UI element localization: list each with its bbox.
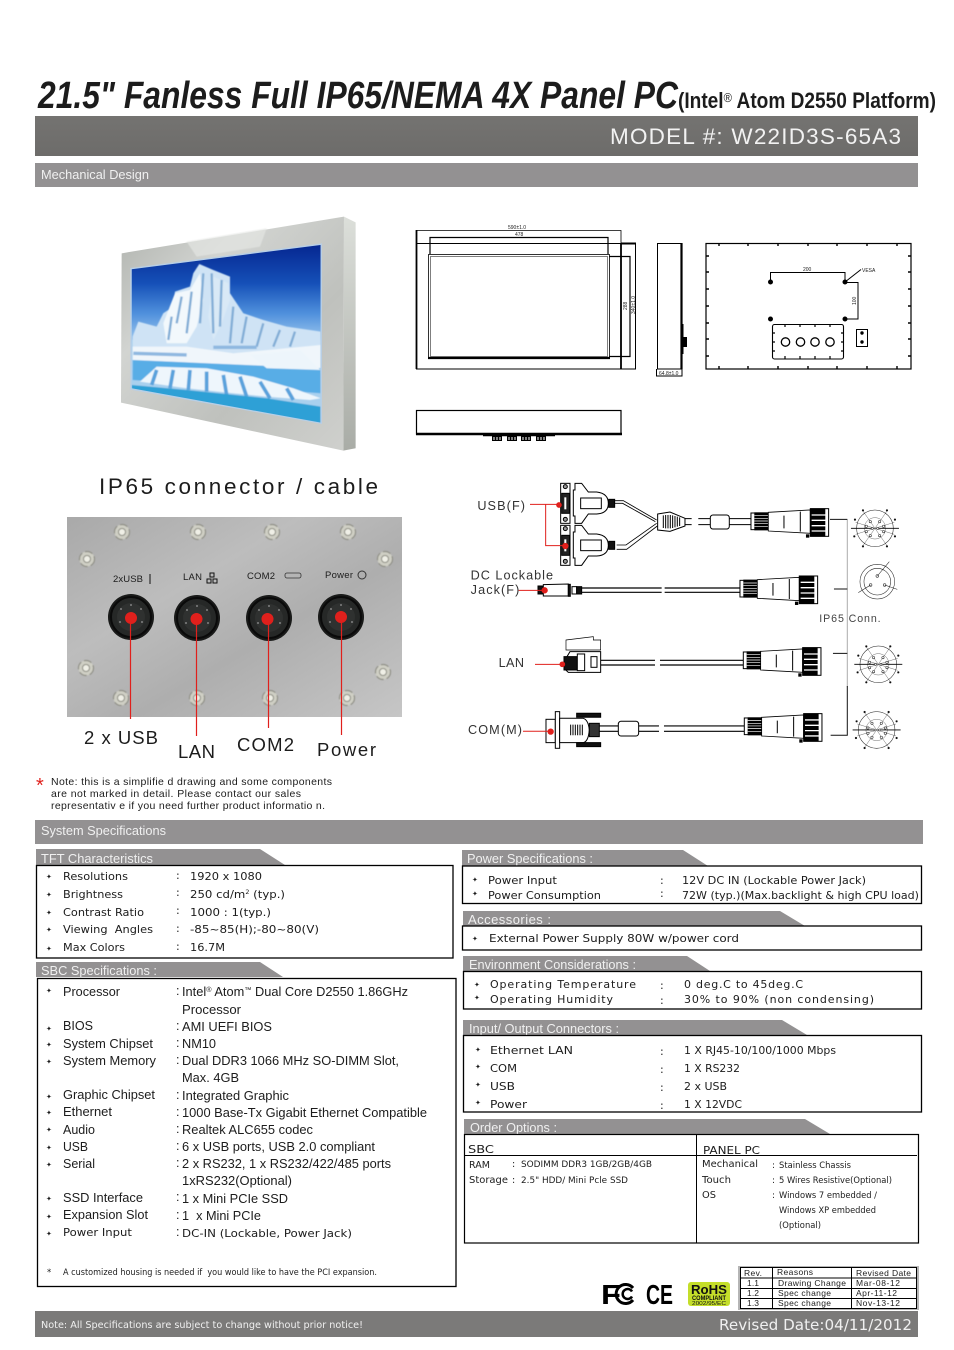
port captions: 2xUSB [113,574,143,585]
drawing: front view: 478 [515,232,524,238]
panel: input/output connectors: : [660,1099,664,1112]
panel: environment considerations: ✦ [474,994,480,1002]
cable labels: DC Lockable [471,568,553,582]
order options: panel PC: OS [702,1190,716,1201]
TFT rows: ✦ [46,873,52,881]
panel: input/output connectors [463,1020,922,1112]
footnote: * [47,1268,51,1278]
panel: power specifications: ✦ [472,876,478,884]
panel: power specifications: Power Input [488,874,558,887]
cable: COM [546,712,822,748]
SBC rows: Processor [182,1003,241,1017]
revision table [738,1266,919,1310]
TFT rows: Viewing Angles [63,923,153,936]
order options: SBC: SODIMM DDR3 1GB/2GB/4GB [521,1160,652,1170]
order options: panel PC: Stainless Chassis [779,1161,851,1171]
panel: TFT characteristics [36,849,453,958]
SBC rows: : [176,1019,179,1033]
SBC rows: NM10 [182,1037,216,1051]
port labels: COM2 [237,734,294,755]
panel: power specifications: Power Specifications : [467,851,593,866]
cable labels: IP65 Conn. [819,613,881,625]
panel: input/output connectors: : [660,1063,664,1076]
SBC rows: Expansion Slot [63,1208,149,1222]
panel: power specifications: Power Consumption [488,889,601,902]
drawing: rear view with VESA holes [706,243,911,369]
panel: input/output connectors: : [660,1045,664,1058]
revision table: Nov-13-12 [856,1298,900,1308]
panel: power specifications [462,850,922,904]
TFT rows: : [176,886,180,899]
SBC rows: System Chipset [63,1037,154,1051]
red leader lines [519,503,568,734]
order options: panel PC: (Optional) [779,1221,821,1231]
SBC rows: DC-IN (Lockable, Power Jack) [182,1227,352,1240]
panel: environment considerations: Operating Temperature [490,978,636,991]
SBC rows: System Memory [63,1054,157,1068]
SBC rows: ✦ [46,987,52,995]
section bar: system specifications [35,820,923,844]
order options: panel PC: Touch [701,1175,731,1186]
SBC rows: ✦ [46,1109,52,1117]
TFT rows: 16.7M [190,941,225,954]
pinouts [851,509,902,749]
order options: SBC: 2.5" HDD/ Mini Pcle SSD [521,1176,628,1186]
SBC rows [46,984,427,1240]
panel: input/output connectors: ✦ [475,1099,481,1107]
cable labels: Jack(F) [471,583,519,597]
SBC rows: : [176,1225,179,1239]
title: 21.5" Fanless Full IP65/NEMA 4X Panel PC [37,75,678,117]
panel: environment considerations [463,956,922,1009]
order options: SBC: RAM [469,1160,490,1171]
panel: environment considerations: ✦ [474,981,480,989]
cable: USB [561,483,829,565]
order options: SBC: : [512,1159,515,1170]
SBC rows: USB [63,1140,88,1154]
cable labels: USB(F) [477,499,525,513]
TFT rows: 1000 : 1(typ.) [190,906,271,919]
order options: panel PC: Windows 7 embedded / [779,1191,878,1201]
red markers [126,612,346,736]
revision table: Mar-08-12 [856,1278,900,1288]
panel: input/output connectors: 1 X RS232 [684,1062,740,1075]
SBC rows: : [176,1208,179,1222]
TFT rows: -85~85(H);-80~80(V) [190,923,319,936]
port labels: 2 x USB [84,727,158,748]
order options: SBC: Storage [469,1175,508,1186]
panel: power specifications: 12V DC IN (Lockable Power Jack) [682,874,866,887]
drawing: side view [656,243,687,377]
drawing: rear view with VESA holes: 200 [803,267,812,273]
SBC rows: 1 x Mini PCIe [182,1209,261,1223]
drawing: side view: 64.8±1.0 [659,371,679,377]
SBC rows: : [176,1088,179,1102]
SBC rows: Max. 4GB [182,1071,239,1085]
SBC rows: ✦ [46,1058,52,1066]
footnote: A customized housing is needed if you would like to have the PCI expansion. [63,1268,377,1278]
panel: environment considerations: 30% to 90% (non condensing) [684,993,874,1006]
model banner [35,116,918,156]
drawing: rear view with VESA holes: 100 [852,296,858,305]
panel: input/output connectors: 1 X RJ45-10/100/1000 Mbps [684,1044,836,1057]
panel: input/output connectors: Power [490,1098,528,1111]
panel: input/output connectors: ✦ [475,1063,481,1071]
TFT rows [46,869,319,954]
TFT rows: : [176,904,180,917]
panel: power specifications: : [660,887,664,900]
panel: accessories: ✦ [472,935,478,943]
footer bar: Revised Date:04/11/2012 [719,1316,912,1334]
SBC rows: Ethernet [63,1105,113,1119]
SBC rows: : [176,1139,179,1153]
SBC rows: : [176,1190,179,1204]
order options: panel PC: : [772,1176,775,1186]
TFT rows: Contrast Ratio [63,906,144,919]
logo: RoHS: 2002/95/EC [692,1301,726,1307]
order options: SBC: SBC [468,1143,494,1156]
IP65 connector bracket [830,519,847,735]
SBC rows: ✦ [46,1144,52,1152]
logo: FCC [601,1279,633,1310]
panel: power specifications: : [660,874,664,887]
SBC rows: Realtek ALC655 codec [182,1123,313,1137]
SBC rows: ® [206,986,212,994]
revision table: Reasons [777,1267,813,1277]
panel: order options [464,1119,918,1243]
SBC rows: ✦ [46,1195,52,1203]
SBC rows: Integrated Graphic [182,1089,289,1103]
panel: accessories [462,911,922,950]
cable: DC jack [538,576,818,605]
drawing: rear view with VESA holes: VESA [862,268,876,274]
TFT rows: 250 cd/m [190,888,242,901]
panel: input/output connectors: COM [490,1062,517,1075]
TFT rows: : [176,922,180,935]
order options: SBC: : [512,1175,515,1186]
revision table: Spec change [778,1288,831,1298]
footer bar [35,1311,918,1337]
panel: input/output connectors: Ethernet LAN [490,1044,573,1057]
panel: input/output connectors: 1 X 12VDC [684,1098,742,1111]
SBC rows: Graphic Chipset [63,1088,156,1102]
cable diagram [468,483,902,749]
revision table: Rev. [744,1268,762,1278]
footer bar: Note: All Specifications are subject to change without prior notice! [41,1320,363,1331]
SBC rows: Power Input [63,1226,133,1239]
panel: accessories: External Power Supply 80W w/power cord [489,932,739,945]
cable labels: COM(M) [468,723,522,737]
note: representativ e if you need further product informatio n. [51,800,325,812]
revision table: Revised Date [856,1268,911,1278]
panel: input/output connectors: ✦ [475,1046,481,1054]
order options: panel PC: : [772,1191,775,1201]
logo: CE: CE [646,1279,673,1310]
round connectors [108,594,364,641]
SBC rows: BIOS [63,1019,93,1033]
order options: panel PC: 5 Wires Resistive(Optional) [779,1176,892,1186]
SBC rows: 2 x RS232, 1 x RS232/422/485 ports [182,1157,391,1171]
SBC rows: Audio [63,1123,95,1137]
section bar: mechanical design: Mechanical Design [41,167,149,182]
panel: input/output connectors: ✦ [475,1081,481,1089]
TFT rows: ✦ [46,945,52,953]
SBC rows: : [176,1053,179,1067]
SBC rows: ✦ [46,1230,52,1238]
port captions: COM2 [247,571,275,582]
drawing: front view: 340±1.0 [631,296,637,314]
panel: input/output connectors: : [660,1081,664,1094]
order options: panel PC: Mechanical [702,1159,758,1170]
cable: LAN [564,637,821,677]
TFT rows: Brightness [63,888,123,901]
SBC rows: ™ [244,987,251,994]
photo: connector panel [67,517,402,736]
cable labels: LAN [499,656,524,670]
SBC rows: : [176,1122,179,1136]
port captions [113,570,366,585]
port captions: Power [325,570,353,581]
panel: accessories: Accessories : [468,912,551,927]
port captions: LAN [183,572,202,583]
TFT rows: 2 [245,889,250,896]
port labels: LAN [178,741,215,762]
logo: RoHS: COMPLIANT [692,1296,726,1302]
order options: SBC [468,1143,652,1186]
note: Note: this is a simplifie d drawing and some components [51,776,332,788]
SBC rows: ✦ [46,1041,52,1049]
panel: SBC specifications [36,962,456,1286]
SBC rows: Dual DDR3 1066 MHz SO-DIMM Slot, [182,1054,399,1068]
logo: RoHS [688,1282,730,1307]
SBC rows: 1000 Base-Tx Gigabit Ethernet Compatible [182,1106,427,1120]
port labels: Power [317,739,376,760]
panel: environment considerations: : [660,994,664,1007]
SBC rows: : [176,1036,179,1050]
panel: SBC specifications: SBC Specifications : [41,963,157,978]
SBC rows: AMI UEFI BIOS [182,1020,272,1034]
SBC rows: : [176,1156,179,1170]
panel: input/output connectors: 2 x USB [684,1080,727,1093]
panel: power specifications: ✦ [472,890,478,898]
SBC rows: : [176,1105,179,1119]
revision table: Drawing Change [778,1278,846,1288]
product photo: panel PC [121,217,356,451]
TFT rows: Max Colors [63,941,125,954]
drawing: bottom view [416,410,622,441]
note [36,775,332,812]
model banner: MODEL #: W22ID3S-65A3 [610,124,901,149]
revision table: 1.3 [747,1298,759,1308]
panel: input/output connectors: USB [490,1080,515,1093]
SBC rows: SSD Interface [63,1191,143,1205]
panel: order options: Order Options : [470,1120,557,1135]
SBC rows: 1xRS232(Optional) [182,1174,292,1188]
panel: input/output connectors: Input/ Output Connectors : [469,1021,619,1036]
SBC rows: Atom [212,985,244,999]
subtitle: (Intel [678,88,731,113]
cable labels [468,499,881,737]
TFT rows: 1920 x 1080 [190,870,262,883]
section bar: mechanical design [35,163,918,187]
panel: environment considerations: Environment Considerations : [469,957,636,972]
note: are not marked in detail. Please contact our sales [51,788,301,800]
SBC rows: ✦ [46,1093,52,1101]
SBC rows: Serial [63,1157,95,1171]
SBC rows: ✦ [46,1161,52,1169]
drawing: front view [416,225,637,369]
SBC rows: Processor [63,985,120,999]
revision table: Spec change [778,1298,831,1308]
TFT rows: ✦ [46,926,52,934]
logo: RoHS: RoHS [691,1282,727,1297]
TFT rows: (typ.) [249,888,285,901]
drawing: front view: 288 [623,301,629,310]
order options: panel PC: PANEL PC [703,1144,760,1157]
SBC rows: ✦ [46,1213,52,1221]
revision table: Apr-11-12 [856,1288,897,1298]
TFT rows: : [176,869,180,882]
note: * [36,775,44,797]
section bar: system specifications: System Specifications [41,823,166,838]
TFT rows: Resolutions [63,870,128,883]
revision table: 1.2 [747,1288,759,1298]
SBC rows: 1 x Mini PCIe SSD [182,1192,288,1206]
drawing: front view: 590±1.0 [508,225,526,231]
panel: environment considerations: Operating Humidity [490,993,613,1006]
logo: FCC: F [601,1279,621,1310]
panel: environment considerations: : [660,979,664,992]
port labels [84,727,376,762]
revision table: 1.1 [747,1278,759,1288]
TFT rows: ✦ [46,891,52,899]
SBC rows: 6 x USB ports, USB 2.0 compliant [182,1140,376,1154]
SBC rows: Dual Core D2550 1.86GHz [251,985,408,999]
panel: power specifications: 72W (typ.)(Max.backlight & high CPU load) [682,889,919,902]
subtitle: ® [724,90,732,105]
SBC rows: ✦ [46,1025,52,1033]
SBC rows: Intel [182,985,206,999]
panel: TFT characteristics: TFT Characteristics [41,851,153,866]
heading: IP65 connector / cable: IP65 connector / cable [99,474,378,499]
SBC rows: ✦ [46,1126,52,1134]
TFT rows: : [176,940,180,953]
TFT rows: ✦ [46,909,52,917]
panel: environment considerations: 0 deg.C to 45deg.C [684,978,803,991]
order options: panel PC [701,1144,892,1231]
screws [78,524,392,706]
SBC rows: : [176,984,179,998]
order options: panel PC: Windows XP embedded [779,1206,876,1216]
order options: panel PC: : [772,1161,775,1171]
